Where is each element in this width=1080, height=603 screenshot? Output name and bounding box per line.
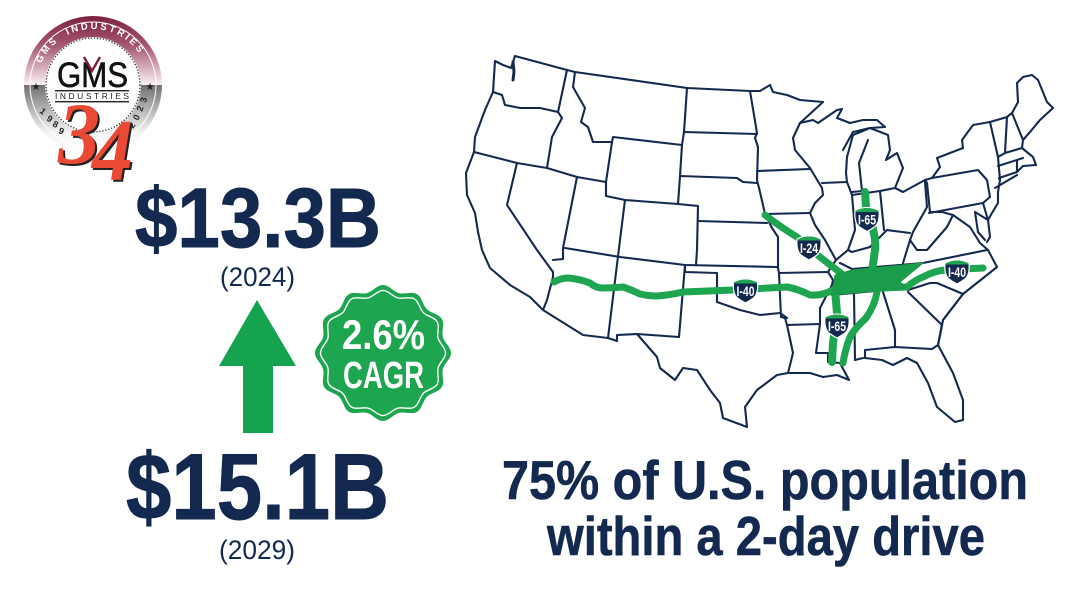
logo number 34: 3	[59, 88, 102, 185]
state borders	[466, 56, 1053, 427]
badge CAGR label: CAGR	[343, 355, 424, 397]
logo arc text: GMS INDUSTRIES	[36, 22, 144, 62]
logo years: 2	[134, 105, 146, 113]
route: I-65 north	[865, 192, 875, 272]
value 2024: $13.3B	[135, 171, 381, 265]
logo: GMS Industries 34 years: INDUSTRIES	[55, 91, 129, 101]
route: I-65 south west branch	[832, 290, 837, 362]
badge scalloped shape	[315, 285, 451, 421]
shield: I-40 west	[733, 279, 758, 303]
route: I-65 south east branch	[843, 292, 877, 363]
Tennessee hub	[832, 263, 923, 295]
up arrow	[219, 300, 296, 433]
shield: I-65 south	[825, 314, 849, 338]
shield: I-40 east	[945, 260, 969, 284]
logo years: 2	[126, 120, 138, 130]
route: I-24	[765, 215, 842, 274]
shield: I-65 south: I-65	[828, 319, 846, 334]
logo years: 3	[138, 96, 149, 103]
logo years: 8	[51, 119, 60, 130]
headline line 2: within a 2-day drive	[546, 505, 985, 567]
US map	[466, 56, 1053, 427]
shield: I-65 north: I-65	[858, 212, 876, 228]
value 2029: $15.1B	[126, 434, 389, 539]
year label 2024: (2024)	[220, 262, 295, 292]
shield: I-65 north	[855, 208, 879, 232]
badge inner line	[320, 290, 446, 416]
logo years: 0	[131, 113, 142, 122]
logo number 34: 4	[90, 103, 133, 200]
logo number 34	[57, 86, 135, 202]
logo ring top	[24, 16, 162, 85]
year label 2029: (2029)	[219, 535, 295, 565]
logo years	[38, 96, 149, 137]
logo stars: ★	[32, 82, 41, 93]
route: I-40	[554, 268, 983, 296]
shield: I-40 east: I-40	[948, 265, 966, 280]
badge: CAGR	[315, 285, 451, 421]
logo number 34: 4	[92, 105, 135, 202]
shield: I-24	[797, 236, 821, 260]
logo number 34: 3	[57, 86, 100, 183]
logo wordmark: GMS	[57, 56, 128, 95]
logo ring bottom	[24, 85, 162, 154]
badge percent: 2.6%	[342, 311, 425, 358]
shield: I-24: I-24	[800, 241, 818, 256]
shield: I-40 west: I-40	[736, 284, 754, 299]
logo years: 9	[45, 113, 54, 124]
logo: GMS Industries 34 years	[24, 16, 162, 202]
headline	[502, 449, 1028, 567]
logo: GMS Industries 34 years: ★	[146, 82, 155, 93]
headline line 1: 75% of U.S. population	[502, 449, 1028, 511]
logo years: 9	[57, 125, 65, 137]
logo years: 1	[38, 106, 48, 117]
